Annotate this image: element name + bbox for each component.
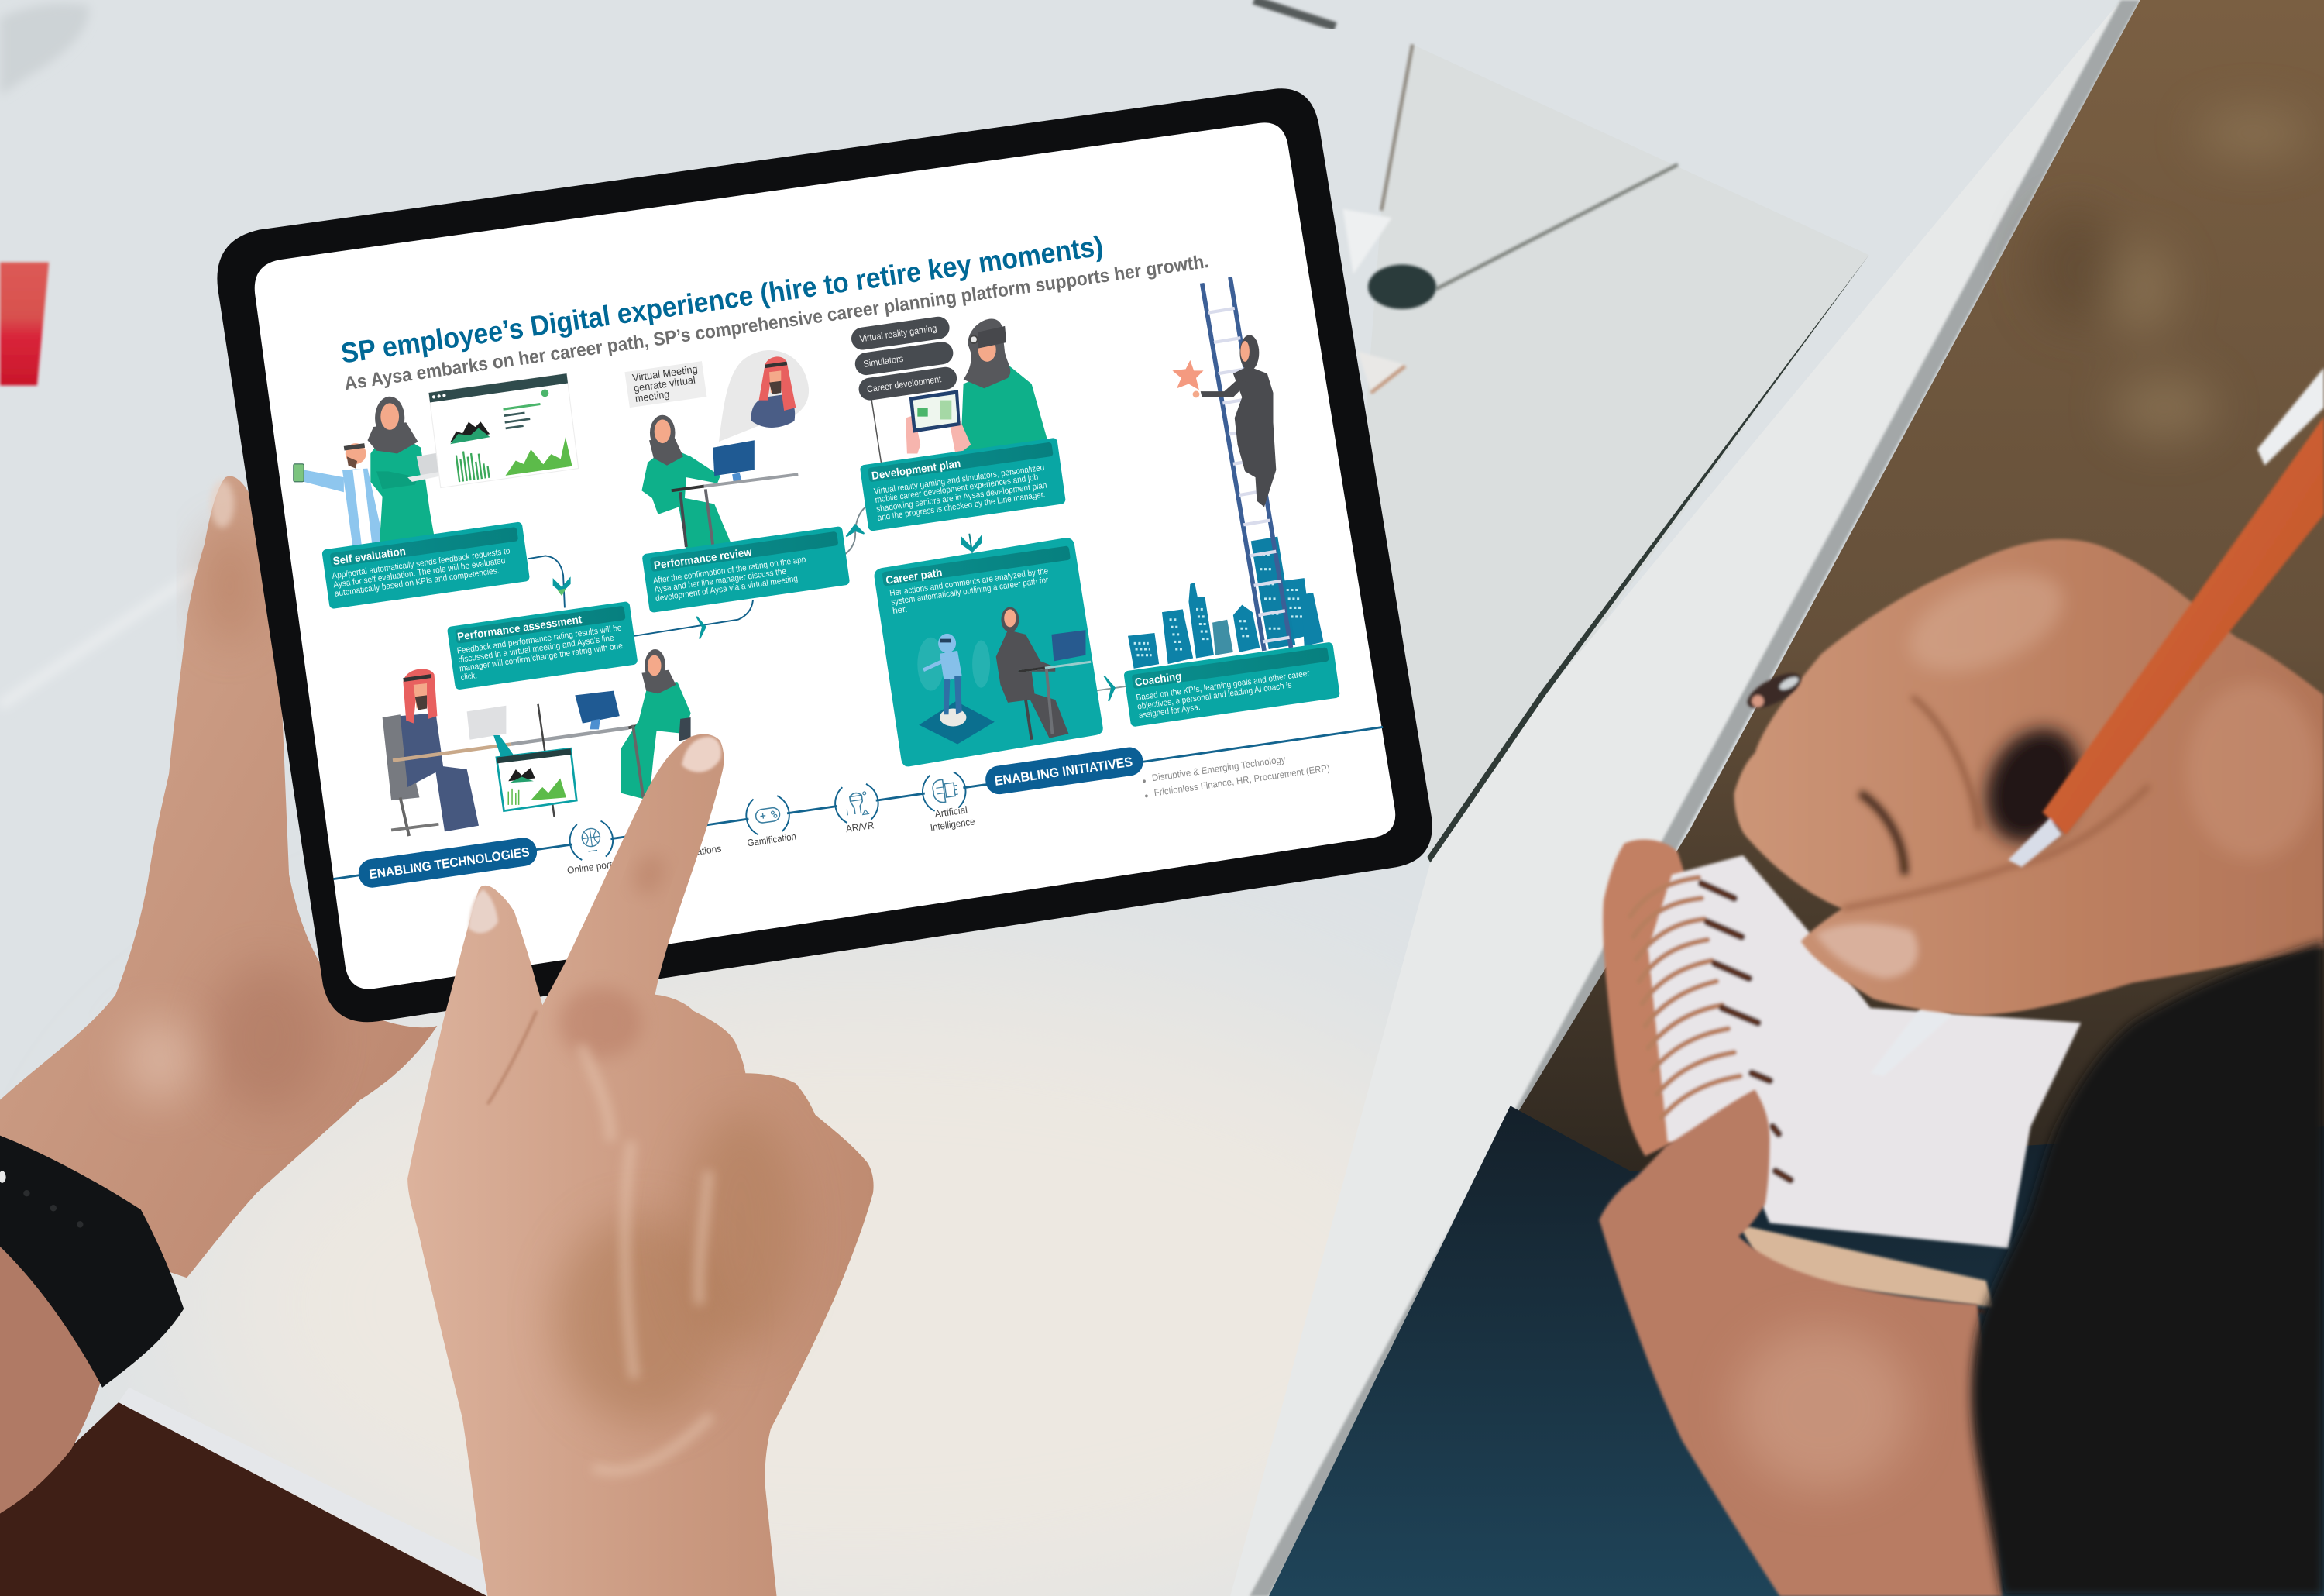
body text: Virtual reality gaming and simulators, personalized — [873, 463, 1045, 497]
virtual meeting note: Virtual Meeting — [631, 363, 699, 384]
connectors and leaf arrows — [528, 507, 1126, 701]
label: artificial intelligence — [930, 803, 975, 833]
pill: virtual reality gaming — [850, 315, 951, 351]
woman with VR headset and tablet — [906, 319, 1048, 458]
ladder — [1202, 277, 1291, 651]
woman at computer — [996, 607, 1091, 740]
city skyline — [1128, 537, 1324, 669]
body text: assigned for Aysa. — [1138, 703, 1201, 721]
heading: Development plan — [871, 458, 961, 483]
label: artificial intelligence: Artificial — [934, 803, 968, 820]
pill: simulators — [854, 340, 954, 377]
label: gamification: Gamification — [747, 831, 797, 848]
robot on chip — [917, 634, 995, 744]
pill: career development: Career development — [866, 373, 942, 394]
body text: Her actions and comments are analyzed by the — [889, 566, 1049, 598]
body text: and the progress is checked by the Line manager. — [877, 490, 1046, 523]
enabling line — [333, 727, 1383, 879]
label: mobile applications: Mobile applications — [642, 842, 722, 865]
body text: Aysa and her line manager discuss the — [654, 567, 787, 595]
man with phone — [294, 443, 384, 547]
person's dark hair — [1972, 941, 2324, 1596]
panel: coaching — [1123, 641, 1340, 727]
body text — [456, 624, 626, 683]
heading: Coaching — [1134, 670, 1182, 690]
body text: objectives, a personal and leading AI coach is — [1137, 680, 1293, 712]
heading: Performance review — [653, 546, 753, 573]
enabling initiatives pill — [984, 745, 1145, 796]
body text: shadowing seniors are in Aysas development plan — [875, 481, 1047, 514]
body text — [889, 566, 1049, 616]
body text: click. — [460, 671, 478, 683]
body text: mobile career development experiences and job — [875, 473, 1039, 505]
speech bubble with manager — [719, 350, 809, 442]
enabling technologies pill: ENABLING TECHNOLOGIES — [368, 844, 531, 882]
dashboard callout — [493, 735, 576, 811]
subtitle: As Aysa embarks on her career path, SP’s comprehensive career planning platform supports her growth. — [343, 251, 1210, 394]
body text: After the confirmation of the rating on the app — [652, 555, 806, 586]
panel: development plan — [860, 438, 1066, 531]
body text: discussed in a virtual meeting and Aysa’s line — [458, 634, 614, 665]
panel: performance review illustration — [624, 350, 809, 549]
star — [1172, 360, 1204, 390]
virtual meeting note — [624, 361, 706, 408]
body text: development of Aysa via a virtual meeting — [655, 574, 799, 604]
label: artificial intelligence: Intelligence — [930, 815, 975, 833]
icon: AR/VR — [833, 781, 881, 826]
right hand pointing at tablet — [407, 734, 874, 1596]
hand holding notebook: palm and thumb — [1599, 1089, 2003, 1596]
enabling initiatives pill: ENABLING INITIATIVES — [994, 755, 1133, 789]
icon: mobile applications — [655, 805, 703, 849]
pen — [2008, 367, 2324, 867]
dashboard screen — [429, 373, 579, 487]
heading: Performance assessment — [456, 614, 583, 644]
body text: manager will confirm/change the rating with one — [459, 641, 624, 674]
body text — [873, 463, 1049, 523]
body text: Feedback and performance rating results will be — [456, 624, 622, 656]
body text — [332, 546, 513, 599]
brown floor blur blobs — [1860, 110, 2309, 786]
body text — [652, 555, 809, 604]
label: online portal: Online portal — [566, 857, 620, 876]
panel: self evaluation — [321, 521, 530, 609]
body text: Aysa for self evaluation. The role will be evaluated — [333, 556, 506, 590]
icon: gamification — [744, 793, 792, 838]
illustration: performance assessment meeting — [383, 649, 691, 836]
manager on chair — [383, 669, 479, 836]
initiatives bullet list: Frictionless Finance, HR, Procurement (ERP) — [1153, 762, 1331, 798]
woman climbing ladder — [1193, 335, 1276, 507]
virtual meeting note: genrate virtual — [633, 374, 696, 394]
hand holding notebook: lower finger — [1603, 840, 1690, 1156]
heading: Career path — [885, 567, 943, 587]
pill: career development — [858, 366, 958, 401]
tablet frame — [217, 88, 1432, 1022]
employee in green — [621, 649, 691, 800]
body text: system automatically outlining a career path for — [891, 576, 1049, 607]
pill: simulators: Simulators — [862, 353, 904, 370]
pill: virtual reality gaming: Virtual reality gaming — [859, 322, 937, 344]
icon: online portal — [567, 818, 615, 863]
tool pills — [850, 315, 958, 463]
desk — [393, 691, 661, 817]
tablet screen — [255, 122, 1395, 989]
heading: Self evaluation — [332, 545, 407, 568]
body text: Based on the KPIs, learning goals and other career — [1136, 669, 1311, 703]
panel: career path — [875, 538, 1103, 766]
panel: self evaluation illustration — [294, 397, 451, 547]
initiatives bullet list: Disruptive & Emerging Technology — [1151, 754, 1287, 783]
body text: App/portal automatically sends feedback requests to — [332, 546, 511, 581]
left hand holding the tablet — [0, 476, 437, 1513]
panel: performance review — [641, 526, 850, 613]
title: SP employee’s Digital experience (hire to retire key moments) — [339, 229, 1105, 370]
desk props: red clip, pen lines, black clip, folder edge — [0, 0, 1869, 863]
body text: her. — [892, 604, 908, 616]
icon: artificial intelligence — [920, 769, 968, 813]
notebook — [1631, 855, 2081, 1312]
label: AR/VR: AR/VR — [845, 819, 875, 834]
woman with laptop — [367, 397, 451, 545]
hand writing with pen — [1734, 539, 2324, 1016]
panel: performance assessment — [447, 601, 638, 690]
body text — [1136, 669, 1313, 721]
ring — [1742, 666, 1806, 715]
enabling technologies pill — [357, 836, 538, 889]
body text: automatically based on KPIs and competencies. — [334, 566, 500, 599]
seated woman at desk — [641, 415, 798, 549]
illustration: ladder and city — [1128, 277, 1324, 669]
palm highlight — [1734, 1326, 1912, 1490]
virtual meeting note: meeting — [634, 388, 670, 404]
pen tip — [1871, 1002, 1952, 1076]
